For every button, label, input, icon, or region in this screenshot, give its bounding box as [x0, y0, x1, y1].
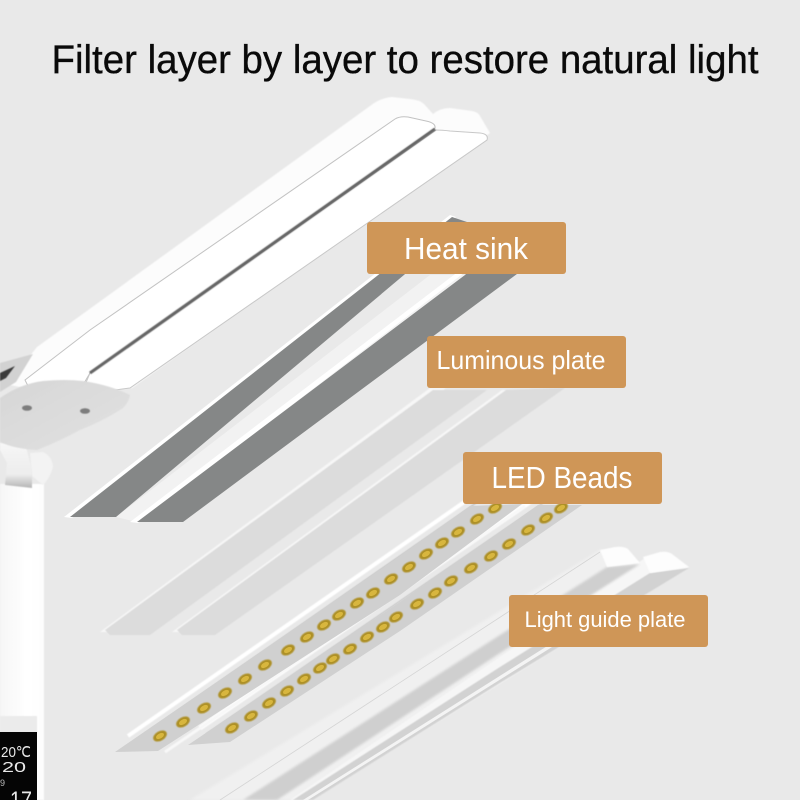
LED beads left row — [151, 500, 504, 744]
LED board left — [115, 504, 522, 752]
hinge shadow detail — [0, 354, 33, 392]
plate highlights — [100, 388, 446, 632]
plate right strip — [177, 388, 565, 635]
label: luminous plate — [427, 336, 626, 388]
slot shadow between panels — [90, 129, 435, 373]
display digits: 20℃ — [1, 744, 31, 761]
right light panel — [85, 130, 487, 392]
LED board right — [188, 505, 582, 745]
disk plate — [0, 380, 130, 450]
lamp head outer shell — [10, 97, 490, 395]
left light panel — [25, 117, 435, 390]
rear hinge knuckle — [30, 452, 53, 485]
front hinge — [0, 443, 32, 488]
label: light guide plate: Light guide plate — [524, 607, 686, 632]
plate left strip — [105, 390, 487, 635]
clock display — [0, 716, 37, 800]
disk holes — [22, 405, 90, 414]
guide plate shadow band right — [293, 568, 689, 800]
light guide plate assembly — [190, 547, 689, 800]
title: Filter layer by layer to restore natural light — [52, 38, 758, 82]
label: heat sink: Heat sink — [404, 231, 528, 266]
heat sink right strip — [137, 260, 521, 522]
end cap right — [643, 552, 689, 573]
label: light guide plate — [509, 595, 708, 647]
lamp column — [0, 484, 44, 800]
end cap left — [600, 547, 640, 567]
heat sink highlights — [64, 215, 456, 518]
LED beads right row — [223, 500, 570, 736]
label: LED beads: LED Beads — [492, 460, 632, 495]
label: luminous plate: Luminous plate — [436, 345, 606, 375]
heat sink light band — [116, 275, 465, 522]
heat sink strips — [64, 215, 521, 523]
label: LED beads — [463, 452, 662, 504]
clock display: 9 — [0, 778, 5, 788]
lamp arm disk and column — [0, 380, 130, 800]
luminous plate strips — [100, 388, 565, 635]
lamp head assembly — [0, 97, 490, 395]
label: heat sink — [367, 222, 566, 274]
guide plate thin outline — [220, 552, 600, 800]
heat sink left strip — [70, 217, 467, 517]
clock display: 20 — [2, 759, 26, 776]
LED bead boards — [115, 495, 582, 752]
guide plate white body — [190, 550, 640, 800]
guide plate inner highlight — [303, 638, 560, 800]
guide plate shadow band left — [243, 564, 640, 800]
board rails — [128, 495, 546, 752]
